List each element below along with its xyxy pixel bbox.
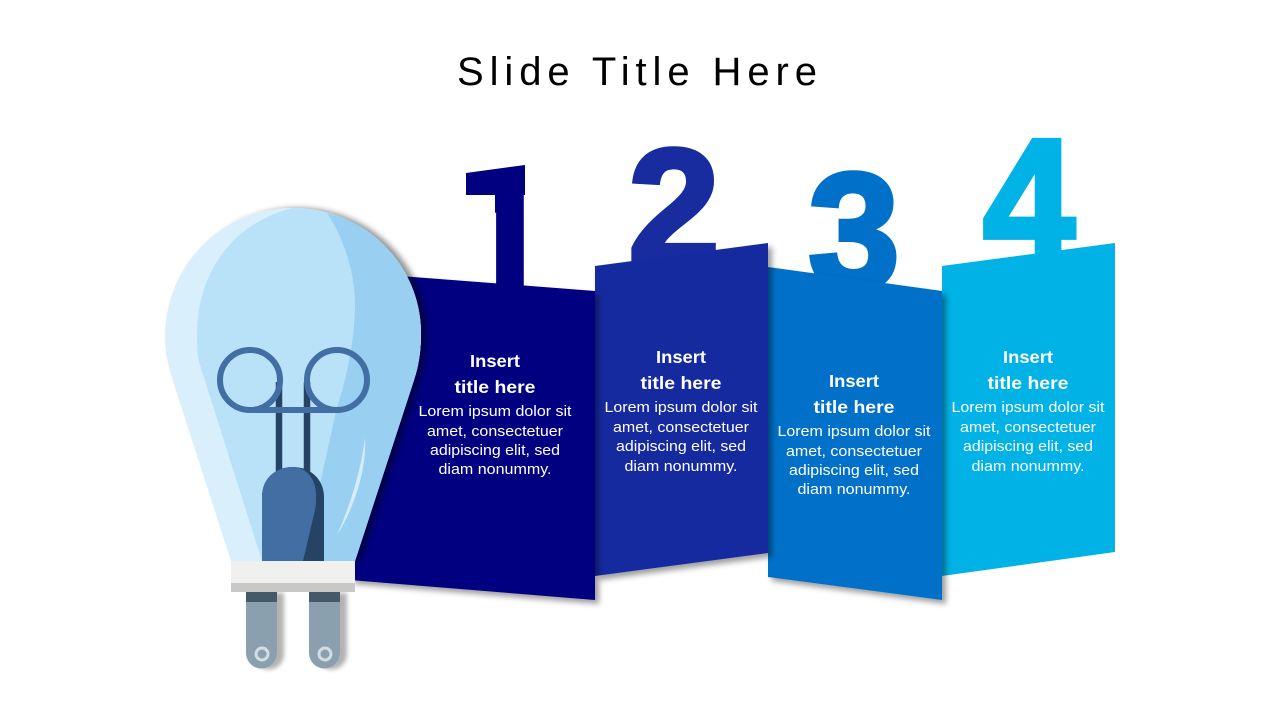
panel 3: diam nonummy. xyxy=(798,482,910,498)
panel 2: amet, consectetuer xyxy=(613,420,749,436)
title: Slide Title Here xyxy=(457,50,817,94)
panel 1: title here xyxy=(454,377,536,397)
panel 4: title here xyxy=(988,373,1069,393)
panel 3: title here xyxy=(814,397,895,417)
panel 2: Insert xyxy=(656,347,706,367)
panel 1 xyxy=(350,276,595,600)
number 4: 4 xyxy=(983,103,1075,300)
panel 1: diam nonummy. xyxy=(438,462,552,478)
icon: light bulb xyxy=(165,208,421,668)
panel 4: Lorem ipsum dolor sit xyxy=(952,400,1104,416)
panel 1: adipiscing elit, sed xyxy=(430,443,560,459)
panel 2: diam nonummy. xyxy=(624,459,738,475)
filament xyxy=(220,350,367,475)
panel 4: amet, consectetuer xyxy=(960,420,1096,436)
panel 3: Lorem ipsum dolor sit xyxy=(778,424,930,440)
panel 3: amet, consectetuer xyxy=(786,444,922,460)
panel 1: Insert xyxy=(470,351,520,371)
number 1: 1 xyxy=(460,141,552,362)
bulb glass xyxy=(165,208,421,561)
panel 4: adipiscing elit, sed xyxy=(963,439,1093,455)
panel 2: Lorem ipsum dolor sit xyxy=(604,400,758,416)
panel 3 xyxy=(768,267,942,600)
bulb base xyxy=(231,561,355,592)
panel 1: Lorem ipsum dolor sit xyxy=(418,404,572,420)
panel 4: diam nonummy. xyxy=(972,459,1084,475)
filament stem xyxy=(262,467,324,561)
panel 2 xyxy=(595,243,768,576)
panel 2: adipiscing elit, sed xyxy=(616,439,746,455)
number 2: 2 xyxy=(628,115,720,299)
number 3: 3 xyxy=(808,139,900,323)
panel 4 xyxy=(942,243,1115,576)
panel 2: title here xyxy=(640,373,722,393)
number 1 xyxy=(466,165,525,286)
panel 4: Insert xyxy=(1003,347,1053,367)
bulb prongs xyxy=(246,592,340,668)
panel 1: amet, consectetuer xyxy=(427,424,563,440)
panel 3: adipiscing elit, sed xyxy=(789,463,919,479)
panel 3: Insert xyxy=(829,371,879,391)
